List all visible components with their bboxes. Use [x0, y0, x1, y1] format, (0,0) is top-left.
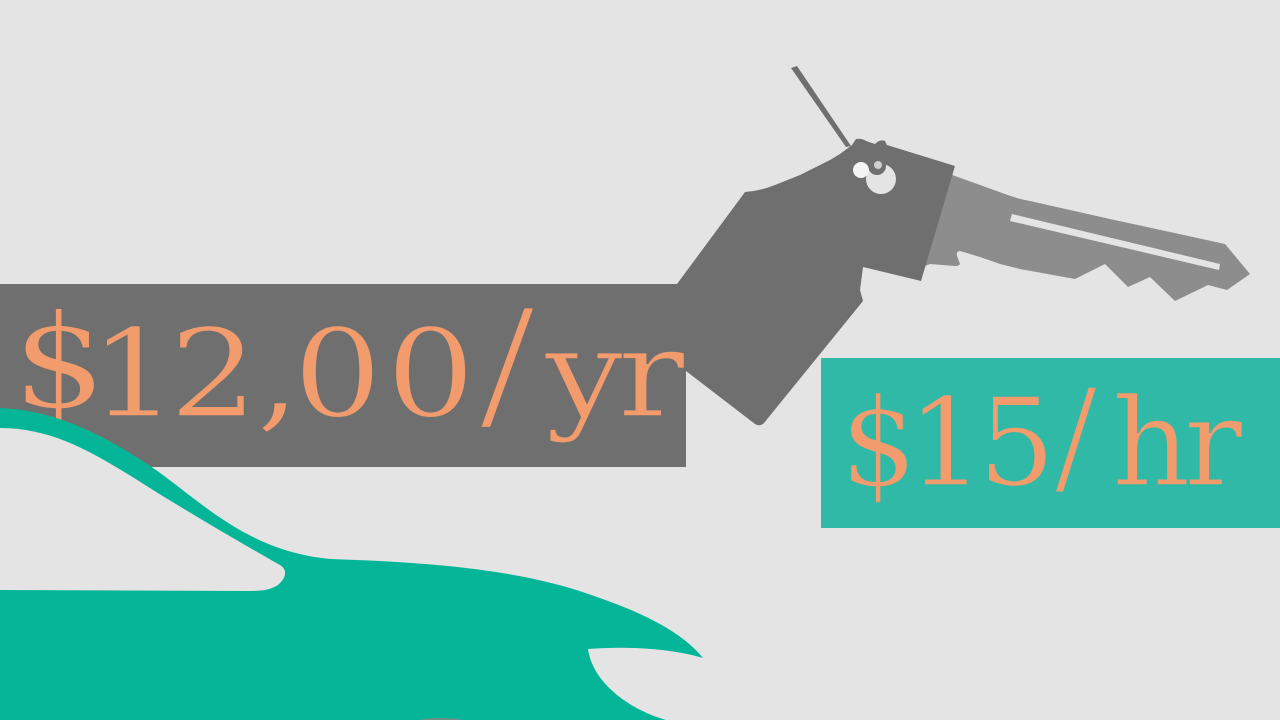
- key hole cover: [868, 157, 886, 175]
- car window: [0, 428, 285, 591]
- key head body: [677, 139, 955, 425]
- key hole small: [874, 161, 882, 169]
- icon: teal car: [0, 408, 703, 720]
- icon: key head: [677, 66, 955, 425]
- icon: key blade: [915, 170, 1250, 301]
- text: yearly salary: 12,00: [89, 304, 475, 446]
- key hole white: [853, 162, 869, 178]
- text: hourly wage: $15: [840, 372, 1056, 514]
- text: yearly salary: /: [478, 277, 537, 450]
- key blade groove: [1010, 214, 1220, 270]
- panel: hourly wage box: [821, 358, 1280, 528]
- car body: [0, 408, 703, 720]
- text: yearly salary: yr: [544, 304, 685, 446]
- key ring hole: [866, 164, 896, 194]
- text: hourly wage: /: [1054, 360, 1098, 512]
- text: hourly wage: hr: [1112, 372, 1243, 514]
- panel: yearly salary bar: [0, 284, 686, 467]
- key ring wire: [791, 66, 851, 147]
- car wheel top: [418, 718, 464, 720]
- text: yearly salary: $: [12, 287, 107, 439]
